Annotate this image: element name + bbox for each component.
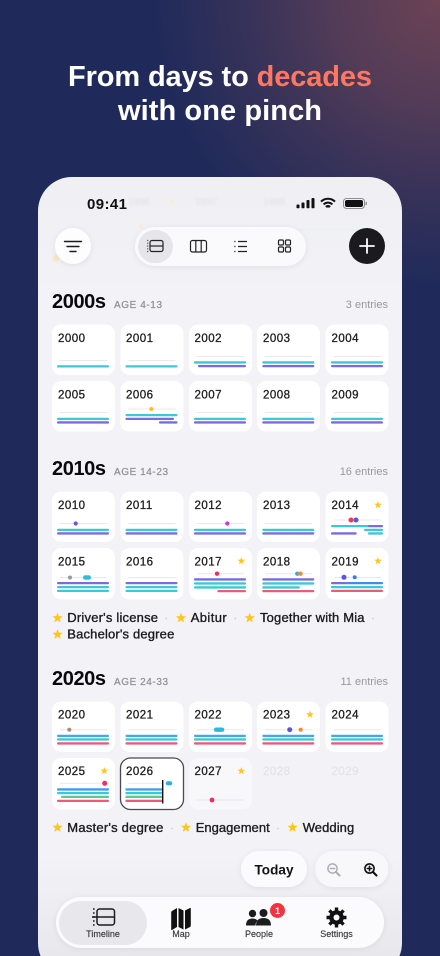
tab: people <box>245 903 285 939</box>
entries count: 3 entries <box>346 299 388 311</box>
today button <box>241 851 307 887</box>
blurred background text: 1996 <box>128 197 151 208</box>
card 2016 <box>120 548 184 600</box>
milestones 2010s: Together with Mia <box>260 610 365 625</box>
blurred background text: 1997 <box>195 197 218 208</box>
age label: AGE 4-13 <box>114 300 162 311</box>
icon: list view <box>234 242 247 252</box>
icon: columns view <box>190 240 206 252</box>
heading: 2020s <box>52 668 106 690</box>
icon: grid view <box>278 240 290 252</box>
blurred background text: 1998 <box>263 197 286 208</box>
card 2009: 2009 <box>332 390 359 402</box>
card 2019 <box>326 548 388 600</box>
tab: map: Map <box>172 929 190 939</box>
card 2023 <box>257 702 320 752</box>
card 2011 <box>120 492 184 542</box>
tab: settings <box>320 908 353 939</box>
card 2008: 2008 <box>263 390 291 402</box>
card 2007 <box>189 381 252 432</box>
card 2018 <box>257 548 320 600</box>
tab: timeline <box>86 909 120 939</box>
add button <box>349 228 385 264</box>
notification badge: 1 <box>275 906 281 917</box>
card 2025 <box>52 758 115 810</box>
title: with one pinch <box>117 95 322 127</box>
card 2014 <box>326 492 388 542</box>
time: 09:41 <box>87 196 127 213</box>
card 2014: 2014 <box>332 500 359 512</box>
card 2028 faded: 2028 <box>263 766 291 778</box>
section: 2020s <box>52 668 388 835</box>
phone panel <box>38 177 402 956</box>
milestones 2020s: Wedding <box>303 820 354 835</box>
card 2024: 2024 <box>332 710 359 722</box>
milestones 2010s: Bachelor's degree <box>67 626 174 642</box>
tab: timeline: Timeline <box>86 929 120 939</box>
card 2021 <box>120 702 184 752</box>
icon: signal <box>296 198 314 208</box>
card 2026 selected: 2026 <box>126 766 154 778</box>
tab: settings: Settings <box>320 929 353 939</box>
milestones 2020s: Master's degree <box>67 820 163 835</box>
age label: AGE 14-23 <box>114 467 168 478</box>
today button: Today <box>254 862 294 878</box>
card 2010 <box>52 492 115 542</box>
icon: wifi <box>321 199 335 207</box>
card 2017: 2017 <box>194 556 222 568</box>
card 2012 <box>189 492 252 542</box>
status bar <box>87 196 367 213</box>
card 2006 <box>120 381 184 432</box>
milestones 2020s <box>52 820 354 835</box>
card 2020: 2020 <box>58 710 86 722</box>
card 2016: 2016 <box>126 556 154 568</box>
card 2023: 2023 <box>263 710 291 722</box>
card 2001 <box>120 324 184 375</box>
card 2002: 2002 <box>194 333 222 345</box>
card 2025: 2025 <box>58 766 86 778</box>
age label: AGE 24-33 <box>114 677 168 688</box>
card 2018: 2018 <box>263 556 291 568</box>
icon: battery <box>344 198 367 208</box>
card 2022 <box>189 702 252 752</box>
entries count: 16 entries <box>340 466 388 478</box>
card 2005 <box>52 381 115 432</box>
entries count: 11 entries <box>340 676 388 688</box>
card 2019: 2019 <box>332 556 359 568</box>
card 2010: 2010 <box>58 500 86 512</box>
icon: timeline view <box>147 240 163 252</box>
card 2015 <box>52 548 115 600</box>
card 2029 faded: 2029 <box>332 766 359 778</box>
blurred background text: Birth <box>62 253 88 265</box>
tab: people: People <box>245 929 273 939</box>
card 2011: 2011 <box>126 500 153 512</box>
card 2008 <box>257 381 320 432</box>
card 2001: 2001 <box>126 333 154 345</box>
card 2003 <box>257 324 320 375</box>
tab bar <box>56 897 384 948</box>
card 2003: 2003 <box>263 333 291 345</box>
card 2024 <box>326 702 388 752</box>
blurred background text <box>53 197 368 265</box>
card 2000 <box>52 324 115 375</box>
card 2022: 2022 <box>194 710 222 722</box>
card 2027: 2027 <box>194 766 222 778</box>
card 2017 <box>189 548 252 600</box>
title: From days to decades <box>68 61 372 93</box>
icon: zoom out <box>328 864 340 876</box>
card 2020 <box>52 702 115 752</box>
card 2026 selected <box>120 758 184 810</box>
card 2027 <box>189 758 252 810</box>
heading: 2010s <box>52 458 106 480</box>
card 2021: 2021 <box>126 710 154 722</box>
section: 2010s <box>52 458 388 642</box>
card 2004: 2004 <box>332 333 359 345</box>
title <box>68 61 372 127</box>
card 2000: 2000 <box>58 333 86 345</box>
milestones 2010s: Abitur <box>191 610 227 625</box>
heading: 2000s <box>52 291 106 313</box>
zoom controls <box>315 851 388 887</box>
card 2009 <box>326 381 388 432</box>
icon: zoom in <box>365 864 376 876</box>
card 2012: 2012 <box>194 500 222 512</box>
card 2013 <box>257 492 320 542</box>
tab: map <box>171 908 191 939</box>
card 2007: 2007 <box>194 390 222 402</box>
milestones 2010s: Driver's license <box>67 610 158 625</box>
card 2002 <box>189 324 252 375</box>
card 2006: 2006 <box>126 390 154 402</box>
card 2015: 2015 <box>58 556 86 568</box>
card 2005: 2005 <box>58 390 86 402</box>
milestones 2020s: Engagement <box>196 820 270 835</box>
view switcher <box>135 227 306 266</box>
section: 2000s <box>52 291 388 432</box>
milestones 2010s <box>52 610 374 642</box>
card 2013: 2013 <box>263 500 291 512</box>
card 2004 <box>326 324 388 375</box>
filter button <box>55 228 91 264</box>
